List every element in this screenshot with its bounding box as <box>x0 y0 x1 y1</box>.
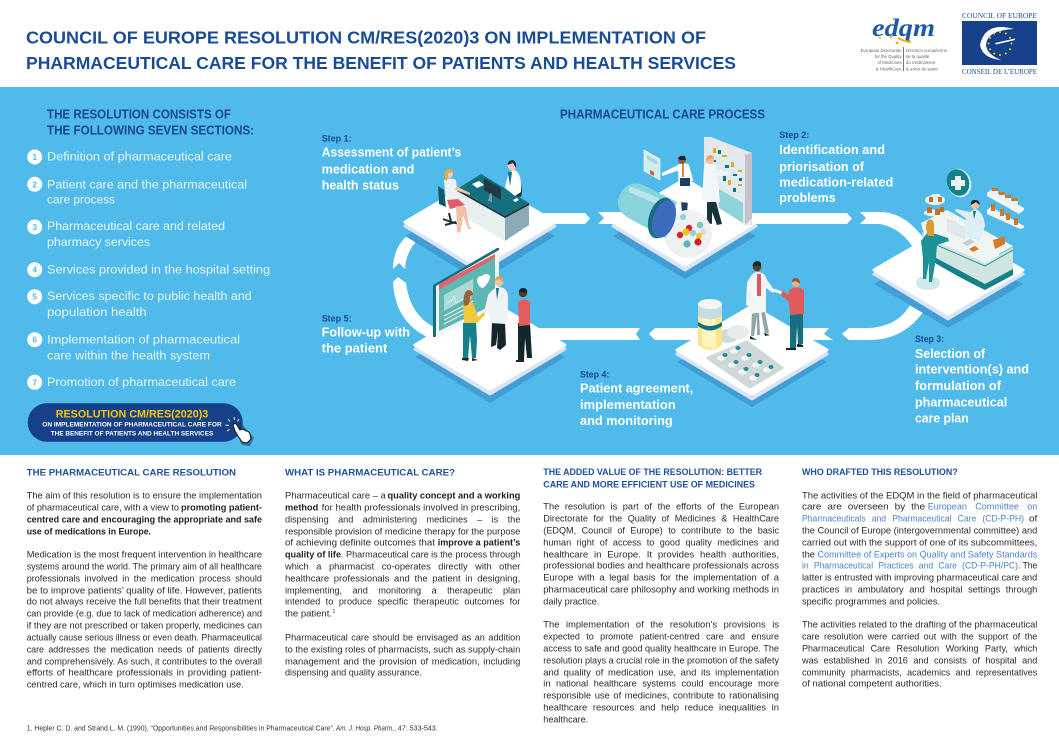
counter <box>921 210 1013 290</box>
paragraph: oversight: European Committee on <box>928 502 1037 512</box>
paragraph: definition: healthcare professionals and the patient in designing, <box>285 574 520 584</box>
paragraph: medication: be to improve patients’ quality of life. However, patients <box>27 586 262 596</box>
section 7: 7 <box>32 378 37 387</box>
step 2 label <box>779 130 893 205</box>
paragraph: medication: Medication is the most frequent intervention in healthcare <box>27 550 262 560</box>
logo: EDQM: European Directorate <box>861 48 902 53</box>
paragraph: implementation: expected to promote patient-centred care and ensure <box>543 632 779 642</box>
logo: EDQM: du médicament <box>906 60 936 65</box>
paragraph: oversight: Pharmaceuticals and Pharmaceutical Care (CD-P-PH) <box>802 514 1024 524</box>
paragraph: role: Pharmaceutical care should be envisaged as an addition <box>285 633 520 643</box>
section 6: Implementation of pharmaceutical <box>47 332 240 346</box>
paragraph: efforts <box>543 502 780 607</box>
section 5: population health <box>47 305 147 319</box>
paragraph: oversight: carried out with the support of one of its subcommittees, <box>802 538 1037 548</box>
paragraph: oversight: . The <box>1018 561 1037 571</box>
footnote: 1. Hepler C. D. and Strand L. M. (1990), “Opportunities and Responsibilities in Pharmaceutical Care”. <box>27 724 335 733</box>
patient <box>438 169 472 233</box>
column heading: CARE AND MORE EFFICIENT USE OF MEDICINES <box>543 478 755 490</box>
logo: EDQM: Direction européenne <box>906 48 948 53</box>
paragraph: working party: community pharmacists, academics and representatives <box>802 668 1038 678</box>
sign: green cross <box>943 165 975 201</box>
doctor <box>484 276 508 350</box>
section 4: Services provided in the hospital setting <box>47 262 270 276</box>
paragraph: definition: the patient. <box>285 609 332 619</box>
step 3 label: Selection of <box>915 347 986 361</box>
paragraph: implementation: responsible use of medicines, contribute to rationalising <box>543 691 779 701</box>
paragraph: medication: professionals involved in the medication process should <box>27 574 262 584</box>
section 2: care process <box>47 193 115 207</box>
pharmacist <box>746 261 775 340</box>
pill plate <box>664 210 712 258</box>
paragraph: oversight: the Council of Europe (intergovernmental committee) and <box>802 526 1037 536</box>
scene: step 3 pharmacy counter <box>874 165 1024 319</box>
paragraph: implementation <box>543 620 779 725</box>
paragraph: working party: of national competent authorities. <box>802 679 942 689</box>
paragraph: working party: The activities related to the drafting of the pharmaceutical <box>802 620 1037 630</box>
button: resolution link: RESOLUTION CM/RES(2020)3 <box>56 409 208 421</box>
paragraph: oversight <box>802 491 1038 607</box>
button: resolution link <box>28 403 243 442</box>
patient man <box>516 288 532 362</box>
paragraph: aim: use of medications in Europe. <box>27 527 151 537</box>
paragraph: medication: systems around the world. The primary aim of all healthcare <box>27 562 262 572</box>
paragraph: working party: Pharmaceutical Care Resolution Working Party, which <box>802 644 1037 654</box>
paragraph: efforts: pharmaceutical care philosophy and working methods in <box>543 585 779 595</box>
step 3 label: pharmaceutical <box>915 396 1007 410</box>
button: resolution link: ON IMPLEMENTATION OF PHARMACEUTICAL CARE FOR <box>42 422 222 429</box>
column heading: THE ADDED VALUE OF THE RESOLUTION: BETTER <box>543 466 762 477</box>
capsule <box>618 183 680 242</box>
paragraph: medication: actually cause serious illness or even death. Pharmaceutical <box>27 633 262 643</box>
platform 4 <box>677 306 827 399</box>
paragraph: definition: . Pharmaceutical care is the process through <box>341 550 520 560</box>
heading: seven sections: THE RESOLUTION CONSISTS OF <box>47 106 231 122</box>
step 5 label: Follow-up with <box>322 326 410 340</box>
section 3: 3 <box>32 223 37 232</box>
paragraph: definition: quality concept and a working <box>388 491 521 501</box>
paragraph: oversight: latter is entrusted with improving pharmaceutical care and <box>802 573 1037 583</box>
pharmacist <box>955 200 985 240</box>
step 2 label: priorisation of <box>779 160 865 174</box>
paragraph: efforts: healthcare in Europe. It provides health authorities, <box>543 550 779 560</box>
section 5: 5 <box>32 293 37 302</box>
logo: EDQM: & HealthCare <box>876 66 902 72</box>
platform 1 <box>405 178 555 272</box>
section 2: Patient care and the pharmaceutical <box>47 177 247 191</box>
section 6: 6 <box>32 336 37 345</box>
section 2: 2 <box>32 180 37 189</box>
paragraph: medication: do not always receive the full benefits that their treatment <box>27 597 262 607</box>
heading: pharmaceutical care process: PHARMACEUTICAL CARE PROCESS <box>560 106 765 122</box>
paragraph: definition: Pharmaceutical care – a <box>285 491 387 501</box>
section 3 <box>27 219 225 249</box>
step 3 label: care plan <box>915 412 969 426</box>
column heading: WHO DRAFTED THIS RESOLUTION? <box>802 466 958 477</box>
paragraph: efforts: human right of access to good quality medicines and <box>543 538 779 548</box>
step 3 label: Step 3: <box>915 334 944 345</box>
logo: Council of Europe: COUNCIL OF EUROPE <box>962 12 1038 20</box>
paragraph: implementation: resolution plays a crucial role in the promotion of the safety <box>543 656 779 666</box>
paragraph: medication: and comprehensively. As such, it contributes to the overall <box>27 657 262 667</box>
column: what is pharmaceutical care <box>284 467 521 678</box>
wall screen <box>433 248 499 337</box>
arrow: step 5 to step 1 (lower arc) <box>393 277 434 340</box>
paragraph: definition: implementing, and monitoring a therapeutic plan <box>285 586 520 596</box>
paragraph: role: dispensing and quality assurance. <box>285 668 422 678</box>
paragraph: efforts: professional bodies and healthcare professionals across <box>543 561 779 571</box>
heading: seven sections <box>47 106 254 138</box>
scene: step 2 pharmacy shelf <box>613 137 756 270</box>
paragraph: definition: method <box>285 503 319 513</box>
paragraph: role: management and the provision of medication, including <box>285 657 520 667</box>
column: the pharmaceutical care resolution <box>27 467 262 690</box>
paragraph: role: to the existing roles of pharmacists, such as supply-chain <box>285 645 520 655</box>
step 1 label: medication and <box>322 162 414 176</box>
column heading: WHAT IS PHARMACEUTICAL CARE? <box>285 467 455 478</box>
step 4 label: Patient agreement, <box>580 382 693 396</box>
paragraph: definition: dispensing and administering medicines – is the <box>285 515 520 525</box>
platform shadows <box>405 192 1023 407</box>
paragraph: oversight: in Pharmaceutical Practices and Care (CD-P-PH/PC) <box>802 561 1018 571</box>
paragraph: definition: for health professionals involved in prescribing, <box>322 503 520 513</box>
paragraph: working party: was established in 2016 and consists of hospital and <box>801 656 1037 666</box>
arrow: step 1 to step 2 <box>530 212 640 224</box>
footnote: , 47: 533-543. <box>394 724 438 733</box>
step 2 label: medication-related <box>779 176 893 190</box>
paragraph: oversight: of <box>1029 514 1038 524</box>
column: who drafted this resolution <box>801 466 1038 689</box>
icon: pointing hand cursor <box>226 417 254 446</box>
column heading <box>543 466 762 490</box>
step 5 label <box>322 313 410 356</box>
paragraph: implementation: healthcare. <box>543 715 588 725</box>
step 5 label: the patient <box>322 342 388 356</box>
section 7: Promotion of pharmaceutical care <box>47 375 236 389</box>
paragraph: definition: quality of life <box>285 550 341 560</box>
paragraph: oversight: specific programmes and policies. <box>802 597 940 607</box>
step 1 label: Step 1: <box>322 133 352 144</box>
title <box>26 28 736 73</box>
paragraph: definition: intended to produce specific therapeutic outcomes for <box>285 597 520 607</box>
arrow: step 5 to step 1 (upper arc) <box>393 232 420 269</box>
logo: Council of Europe <box>962 12 1038 76</box>
section 5 <box>27 289 252 319</box>
desk <box>457 174 529 241</box>
platform 5 <box>415 301 565 394</box>
paragraph: definition: of achieving definite outcomes that <box>285 538 435 548</box>
paragraph: aim <box>27 491 262 537</box>
arrow: step 2 to step 3 <box>745 212 925 246</box>
patient <box>774 278 804 350</box>
paragraph: oversight: care are overseen by the <box>802 502 925 512</box>
logo: EDQM: de la qualité <box>906 54 930 59</box>
title: COUNCIL OF EUROPE RESOLUTION CM/RES(2020)3 ON IMPLEMENTATION OF <box>26 28 706 48</box>
paragraph: aim: The aim of this resolution is to ensure the implementation <box>27 491 262 501</box>
section 1: Definition of pharmaceutical care <box>47 150 232 164</box>
paragraph: medication: can provide (e.g. due to lack of medication adherence) and <box>27 609 262 619</box>
logo: EDQM: for the Quality <box>875 54 902 59</box>
section 6: care within the health system <box>47 348 210 362</box>
scene: step 4 patient agreement <box>677 261 827 399</box>
blister pack <box>708 342 782 387</box>
step 1 label: Assessment of patient’s <box>322 146 461 160</box>
paragraph: medication: efforts of healthcare professionals in providing patient- <box>27 668 262 678</box>
panel: blue process band <box>0 87 1059 455</box>
footnote: Am. J. Hosp. Pharm. <box>335 724 394 733</box>
platform 2 <box>613 179 756 270</box>
paragraph: implementation: access to safe and good quality healthcare in Europe. The <box>543 644 779 654</box>
paragraph: working party: care resolution were carried out with the support of the <box>802 632 1037 642</box>
logo: Council of Europe: CONSEIL DE L’EUROPE <box>962 68 1038 76</box>
customer <box>916 220 949 290</box>
paragraph: implementation: and quality of medication use, and its implementation <box>543 668 779 678</box>
shelf unit <box>704 137 752 225</box>
step 4 label: and monitoring <box>580 414 673 428</box>
step 3 label: intervention(s) and <box>915 362 1029 376</box>
logo: EDQM: & soins de santé <box>906 66 938 72</box>
paragraph: medication <box>27 550 262 690</box>
paragraph: definition <box>284 491 521 619</box>
platform 3 <box>874 227 1023 319</box>
button: resolution link: THE BENEFIT OF PATIENTS AND HEALTH SERVICES <box>51 431 214 438</box>
paragraph: aim: of pharmaceutical care, with a view to <box>27 503 179 513</box>
patient woman <box>462 290 485 361</box>
paragraph: definition: which a pharmacist co-operates directly with other <box>284 562 520 572</box>
step 1 label: health status <box>322 179 399 193</box>
pharmacist right <box>702 155 731 225</box>
paragraph: aim: centred care and encouraging the appropriate and safe <box>27 515 262 525</box>
paragraph: medication: care addresses the medication needs of patients directly <box>27 645 262 655</box>
section 3: Pharmaceutical care and related <box>47 219 225 233</box>
arrow: step 4 to step 5 <box>530 328 700 340</box>
paragraph: implementation: healthcare resources and help reduce inequalities in <box>543 703 779 713</box>
paragraph: definition: responsible provision of medicine therapy for the purpose <box>285 527 520 537</box>
floating chart panel <box>644 150 660 180</box>
paragraph: efforts: daily practice. <box>543 597 599 607</box>
section 2 <box>27 177 247 207</box>
step 2 label: problems <box>779 191 836 205</box>
jar stand <box>924 194 946 216</box>
paragraph: working party <box>801 620 1038 689</box>
paragraph: efforts: The resolution is part of the efforts of the European <box>543 502 779 512</box>
paragraph: definition: 1 <box>332 609 336 615</box>
logo: EDQM: of Medicines <box>877 60 902 65</box>
loose tablets <box>718 325 749 343</box>
panel: seven sections list <box>27 106 270 390</box>
pharmacist left <box>662 156 693 213</box>
paragraph: aim: promoting patient- <box>181 503 262 513</box>
arrow: step 3 to step 4 curve <box>842 299 928 340</box>
logo: EDQM <box>861 15 948 72</box>
pill bottle <box>698 299 722 350</box>
step 1 label <box>322 133 461 193</box>
paragraph: oversight: Committee of Experts on Quality and Safety Standards <box>818 550 1038 560</box>
wall shelves with jars <box>987 188 1024 229</box>
step 3 label <box>915 334 1029 426</box>
paragraph: role <box>285 633 520 678</box>
heading: seven sections: THE FOLLOWING SEVEN SECTIONS: <box>47 122 254 138</box>
step 3 label: formulation of <box>915 379 1002 393</box>
section 6 <box>27 332 240 362</box>
step 5 label: Step 5: <box>322 313 352 324</box>
paragraph: implementation: The implementation of the resolution’s provisions is <box>543 620 779 630</box>
section 3: pharmacy services <box>47 235 150 249</box>
step 4 label <box>580 369 693 428</box>
section 1: 1 <box>32 153 37 162</box>
paragraph: oversight: the <box>802 550 815 560</box>
paragraph: implementation: in national healthcare systems could encourage more <box>543 679 779 689</box>
scene: step 5 follow-up <box>415 248 565 394</box>
paragraph: oversight: practices in ambulatory and hospital settings through <box>802 585 1037 595</box>
arrow: into step 4 <box>790 328 833 340</box>
section 5: Services specific to public health and <box>47 289 252 303</box>
doctor <box>505 160 522 197</box>
paragraph: efforts: Directorate for the Quality of Medicines & HealthCare <box>543 514 779 524</box>
step 4 label: implementation <box>580 398 676 412</box>
step 4 label: Step 4: <box>580 369 609 380</box>
scene: step 1 consultation <box>405 160 555 272</box>
column heading: THE PHARMACEUTICAL CARE RESOLUTION <box>27 467 236 478</box>
step 2 label: Step 2: <box>779 130 809 141</box>
step 2 label: Identification and <box>779 143 885 157</box>
section 4: 4 <box>32 266 37 275</box>
paragraph: efforts: Europe with a legal basis for the implementation of a <box>543 573 780 583</box>
title: PHARMACEUTICAL CARE FOR THE BENEFIT OF PATIENTS AND HEALTH SERVICES <box>26 53 736 73</box>
logo: EDQM: edqm <box>872 15 935 42</box>
paragraph: medication: if they are not prescribed or taken properly, medicines can <box>27 621 262 631</box>
paragraph: efforts: (EDQM, Council of Europe) to contribute to the basic <box>543 526 779 536</box>
column: the added value <box>543 466 780 725</box>
paragraph: medication: centred care, which in turn optimises medication use. <box>27 680 244 690</box>
paragraph: definition: improve a patient’s <box>438 538 520 548</box>
paragraph: oversight: The activities of the EDQM in the field of pharmaceutical <box>802 491 1037 501</box>
